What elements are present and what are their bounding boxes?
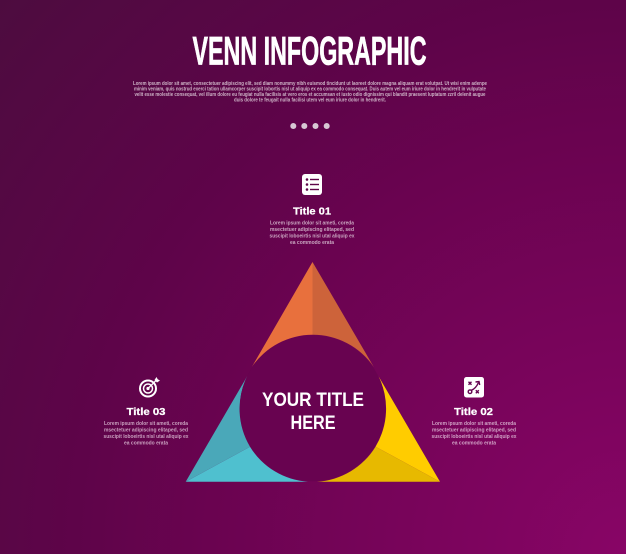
text block: title 01: suscipit loboeirtis nisl utal aliquip ex [270, 234, 355, 240]
text block: title 02 [432, 406, 517, 446]
text block: title 03: Lorem ipsum dolor sit ameti, coreda [104, 421, 188, 427]
text block: title 01 [270, 206, 355, 246]
venn triangle [186, 262, 440, 482]
intro text block [133, 81, 487, 104]
center circle: HERE [290, 413, 336, 434]
segment: orange [252, 262, 374, 367]
center circle: YOUR TITLE [262, 390, 364, 411]
intro text block: velit esse molestie consequat, vel illum dolore eu feugiat nulla facilisis at vero eros et accumsan et iusto odio dignissim qui blandit praesent luptatum zzril delenit augue [134, 92, 486, 98]
pagination dots [290, 123, 330, 129]
text block: title 02: Title 02 [454, 406, 493, 418]
text block: title 02: Lorem ipsum dolor sit ameti, coreda [432, 421, 516, 427]
intro text block: Lorem ipsum dolor sit amet, consectetuer adipiscing elit, sed diam nonummy nibh euismod tincidunt ut laoreet dolore magna aliquam erat volutpat. Ut wisi enim adenpe [133, 81, 487, 87]
title: VENN INFOGRAPHIC [192, 30, 426, 74]
text block: title 01: Title 01 [293, 206, 331, 218]
text block: title 03: msectetuer adipiscing elitaped, sed [104, 428, 188, 434]
text block: title 01: Lorem ipsum dolor sit ameti, coreda [270, 220, 354, 226]
intro text block: minim veniam, quis nostrud exerci tation ullamcorper suscipit lobortis nisl ut aliquip ex ea commodo consequat. Duis autem vel eum iriure dolor in hendrerit in vulputate [134, 86, 486, 92]
text block: title 02: suscipit loboeirtis nisl utal aliquip ex [432, 434, 517, 440]
text block: title 03 [104, 406, 189, 446]
center circle [240, 335, 386, 481]
text block: title 01: msectetuer adipiscing elitaped, sed [270, 227, 354, 233]
text block: title 02: msectetuer adipiscing elitaped, sed [432, 428, 516, 434]
intro text block: duis dolore te feugait nulla facilisi utem vel eum iriure dolor in hendrerit. [234, 98, 387, 104]
text block: title 03: Title 03 [126, 406, 166, 418]
icon: list [302, 174, 322, 195]
text block: title 03: ea commodo erata [124, 440, 168, 446]
text block: title 03: suscipit loboeirtis nisl utal aliquip ex [104, 434, 189, 440]
segment: yellow [317, 376, 440, 482]
text block: title 02: ea commodo erata [452, 440, 496, 446]
icon: target [140, 377, 160, 396]
icon: strategy [464, 377, 484, 398]
text block: title 01: ea commodo erata [290, 240, 334, 246]
segment: teal [186, 376, 308, 482]
